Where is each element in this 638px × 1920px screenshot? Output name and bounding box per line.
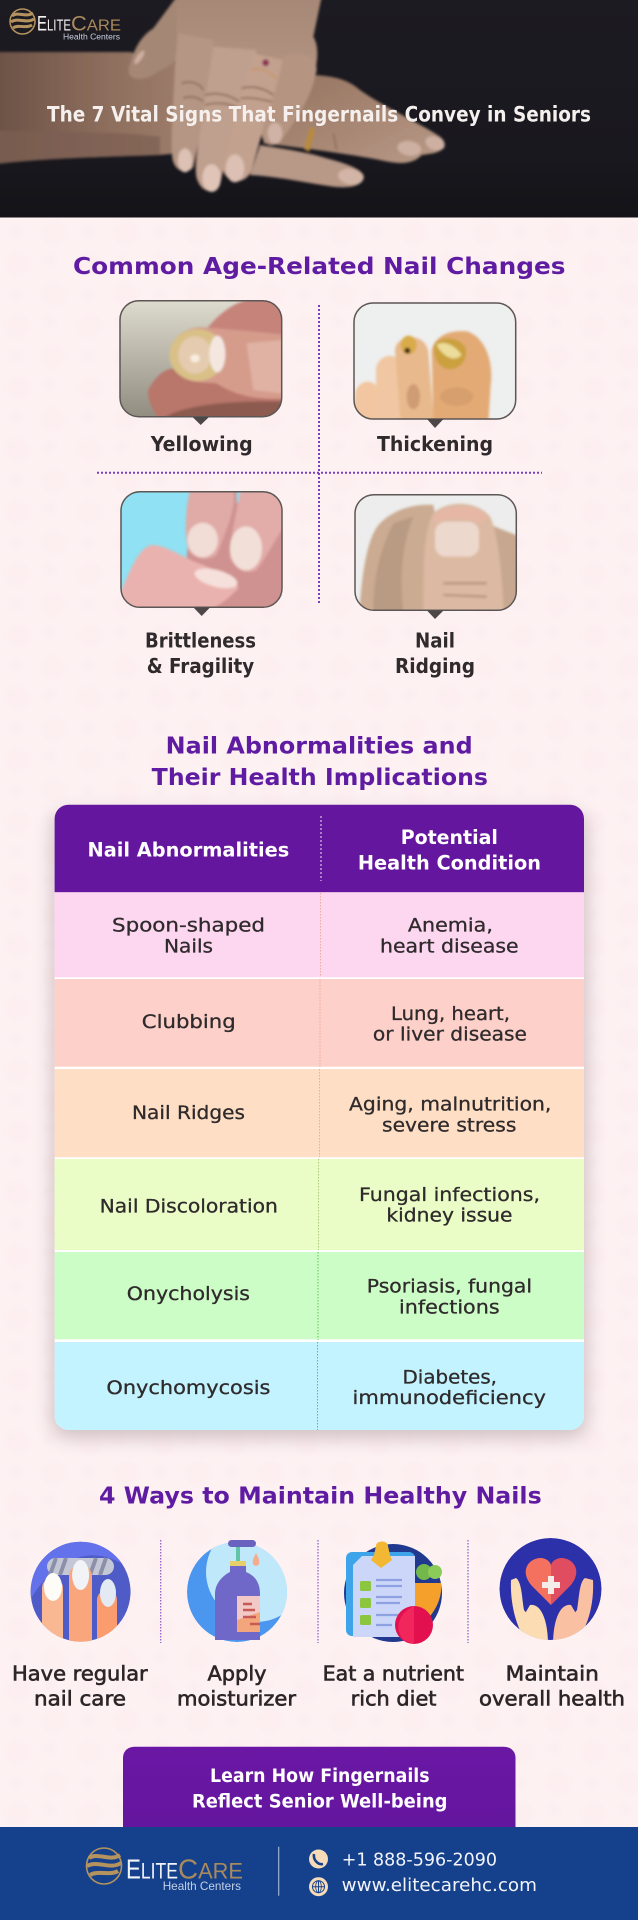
footer logo: Health Centers <box>163 1879 241 1893</box>
pointer <box>427 610 444 619</box>
label <box>12 1662 149 1710</box>
table: nail abnormalities and health conditions <box>52 804 587 1438</box>
row: clubbing: or liver disease <box>373 1024 527 1046</box>
label: Brittleness <box>145 629 256 653</box>
hero logo: Health Centers <box>63 31 120 41</box>
label <box>395 629 475 678</box>
table header row: Health Condition <box>358 851 541 874</box>
row: spoon-shaped nails: Anemia, <box>408 915 493 937</box>
label: overall health <box>479 1686 625 1710</box>
row: nail discoloration <box>54 1159 585 1250</box>
row: spoon-shaped nails: Spoon-shaped <box>112 915 265 937</box>
icon: diet checklist and vegetables <box>344 1542 442 1644</box>
row: onycholysis: Onycholysis <box>127 1283 250 1305</box>
icon: hands holding a heart <box>500 1538 602 1645</box>
row: clubbing: Clubbing <box>142 1011 236 1033</box>
hands photo <box>0 0 447 192</box>
icon: fingers and nail file <box>30 1541 131 1650</box>
call to action box: Reflect Senior Well-being <box>192 1792 448 1813</box>
row: onychomycosis: Diabetes, <box>402 1366 497 1388</box>
heading: common age-related nail changes: Common Age-Related Nail Changes <box>73 252 566 280</box>
row: onycholysis <box>54 1252 585 1339</box>
heading: nail abnormalities and their health implications <box>152 731 488 791</box>
table header row: Potential <box>401 826 498 849</box>
row: onychomycosis: Onychomycosis <box>106 1377 270 1399</box>
hero logo <box>10 9 121 41</box>
footer logo <box>86 1848 243 1893</box>
label: moisturizer <box>177 1686 297 1710</box>
label: Nail <box>415 629 455 653</box>
row: nail discoloration: Fungal infections, <box>359 1184 540 1206</box>
tip: apply moisturizer <box>178 1540 296 1706</box>
icon: phone <box>309 1850 328 1868</box>
row: onycholysis: Psoriasis, fungal <box>367 1275 532 1297</box>
label: & Fragility <box>147 654 254 678</box>
label: Thickening <box>377 432 493 456</box>
row: onycholysis: infections <box>399 1296 500 1318</box>
label: Yellowing <box>150 432 253 456</box>
hero logo: ELITE <box>37 13 71 36</box>
label <box>145 629 256 678</box>
tip dividers <box>161 1540 468 1643</box>
photo card: yellowing <box>120 298 287 456</box>
footer logo: CARE <box>178 1853 243 1884</box>
table header row <box>54 804 585 892</box>
row: nail ridges: Aging, malnutrition, <box>349 1094 551 1116</box>
pointer <box>194 608 210 616</box>
label <box>177 1662 297 1710</box>
label: Ridging <box>395 654 475 678</box>
pointer <box>427 419 444 428</box>
row: nail discoloration: Nail Discoloration <box>100 1196 278 1218</box>
website: www.elitecarehc.com <box>342 1875 537 1896</box>
row: nail ridges: severe stress <box>382 1114 516 1136</box>
icon: lotion bottle <box>187 1540 287 1642</box>
tip: maintain overall health <box>479 1538 625 1710</box>
label: Eat a nutrient <box>323 1662 464 1686</box>
call to action box <box>123 1747 516 1827</box>
icon: globe <box>309 1877 328 1896</box>
row: clubbing: Lung, heart, <box>391 1003 510 1025</box>
label: rich diet <box>351 1686 437 1710</box>
photo card: brittleness and fragility <box>120 490 287 678</box>
label: Have regular <box>12 1662 149 1686</box>
hero photo banner <box>0 0 638 217</box>
tip: nutrient rich diet <box>323 1542 464 1710</box>
footer band <box>0 1827 638 1920</box>
row: spoon-shaped nails: Nails <box>164 935 213 957</box>
row: nail ridges <box>54 1069 585 1157</box>
footer logo: ELITE <box>126 1853 178 1884</box>
table header row: Nail Abnormalities <box>88 839 289 862</box>
label <box>479 1662 625 1710</box>
pointer <box>192 417 209 425</box>
heading: nail abnormalities and their health implications: Their Health Implications <box>152 763 488 791</box>
label: Maintain <box>506 1662 599 1686</box>
row: onychomycosis <box>54 1342 585 1431</box>
quadrant dotted dividers <box>97 305 542 605</box>
label: Apply <box>208 1662 267 1686</box>
label: nail care <box>34 1686 126 1710</box>
photo card: nail ridging <box>355 494 520 678</box>
row: onychomycosis: immunodeficiency <box>352 1387 546 1409</box>
label <box>323 1662 464 1710</box>
heading: nail abnormalities and their health implications: Nail Abnormalities and <box>166 731 473 759</box>
heading: 4 ways to maintain healthy nails: 4 Ways to Maintain Healthy Nails <box>99 1481 542 1509</box>
row: spoon-shaped nails: heart disease <box>380 936 519 958</box>
row: clubbing <box>54 979 585 1067</box>
call to action box: Learn How Fingernails <box>210 1766 430 1787</box>
row: nail discoloration: kidney issue <box>386 1205 512 1227</box>
photo card: thickening <box>353 303 516 456</box>
tip: regular nail care <box>12 1541 149 1710</box>
row: spoon-shaped nails <box>54 892 585 977</box>
row: nail ridges: Nail Ridges <box>132 1102 245 1124</box>
phone number: +1 888-596-2090 <box>342 1850 497 1871</box>
hero logo: CARE <box>71 13 121 36</box>
